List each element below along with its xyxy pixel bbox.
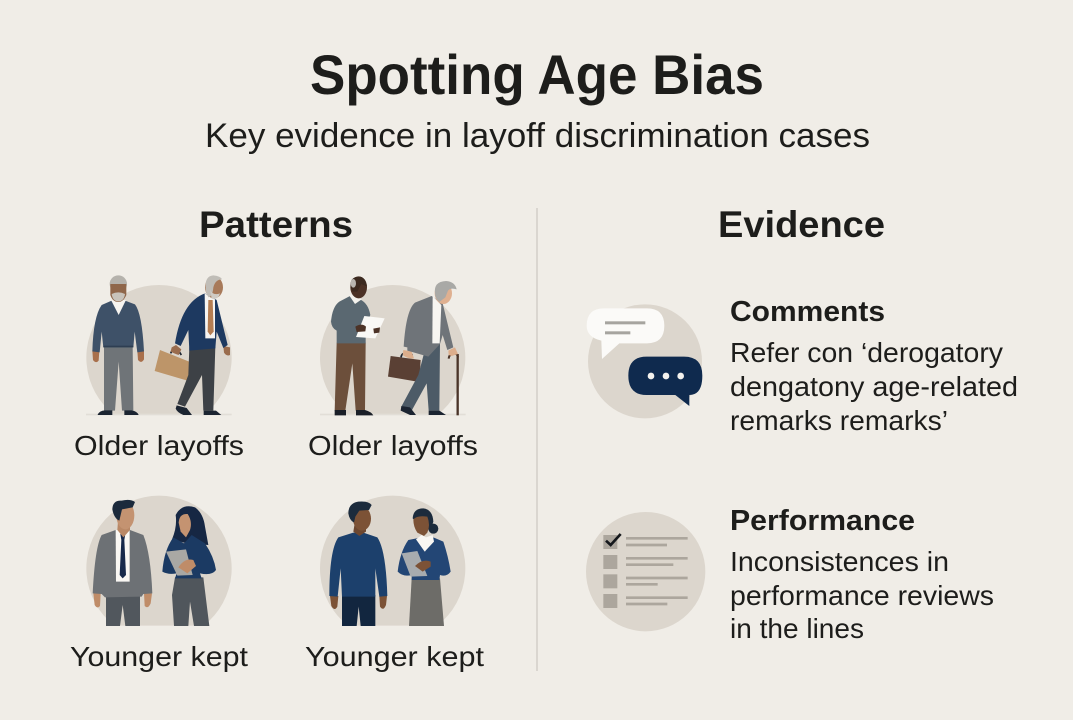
text: comments description: Refer con ‘derogatory — [730, 337, 1003, 368]
figure: older man with briefcase — [155, 275, 230, 415]
text: comments description: remarks remarks’ — [730, 405, 948, 436]
figure: older man in sweater — [92, 275, 144, 415]
icon: checklist — [586, 512, 705, 631]
figure: young man in suit — [93, 500, 152, 626]
text: performance description: performance reviews — [730, 580, 994, 611]
label: younger kept 1: Younger kept — [70, 641, 248, 672]
figure: young woman with tablet and bun — [398, 508, 451, 626]
figure: young man in sweater — [329, 501, 387, 626]
illustration: younger kept 2 — [320, 496, 465, 626]
subtitle: Key evidence in layoff discrimination cases — [205, 117, 870, 155]
title: Spotting Age Bias — [310, 43, 764, 106]
text: performance description: Inconsistences in — [730, 546, 949, 577]
label: younger kept 2: Younger kept — [305, 641, 484, 672]
heading: evidence: Evidence — [718, 204, 885, 245]
heading: patterns: Patterns — [199, 204, 353, 245]
text: performance description: in the lines — [730, 613, 864, 644]
text: comments description — [730, 337, 1018, 436]
figure: older man reading paper — [331, 276, 385, 415]
illustration: older layoffs 2 — [320, 276, 466, 415]
heading: comments: Comments — [730, 296, 885, 328]
illustration: younger kept 1 — [86, 496, 232, 626]
text: comments description: dengatony age-related — [730, 371, 1018, 402]
heading: performance: Performance — [730, 505, 915, 537]
illustration: older layoffs 1 — [86, 275, 232, 415]
figure: young woman with tablet — [162, 506, 216, 626]
figure: older man with cane and briefcase — [388, 281, 458, 415]
text: performance description — [730, 546, 994, 644]
label: older layoffs 2: Older layoffs — [308, 430, 478, 461]
icon: speech bubbles — [587, 304, 702, 418]
label: older layoffs 1: Older layoffs — [74, 430, 244, 461]
